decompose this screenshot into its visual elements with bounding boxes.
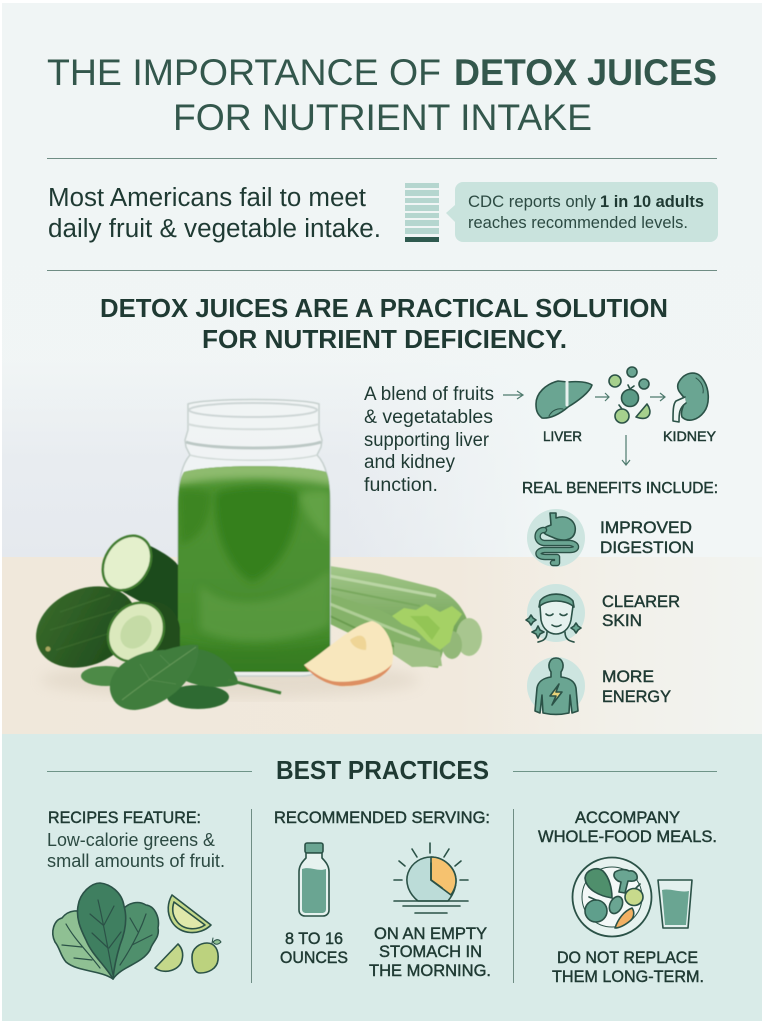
blend description xyxy=(364,384,494,496)
icon: fruits xyxy=(609,367,650,423)
benefit: skin: SKIN xyxy=(602,611,642,630)
section heading xyxy=(100,293,668,354)
benefit: energy xyxy=(527,657,671,715)
benefit: energy: ENERGY xyxy=(602,687,671,706)
organ labels: LIVER xyxy=(543,429,582,444)
intake statement xyxy=(48,184,381,243)
arrow: liver to fruit xyxy=(595,393,609,401)
icon: citrus and apple xyxy=(155,895,221,973)
benefit: digestion: DIGESTION xyxy=(600,538,694,557)
spinach xyxy=(81,645,281,710)
icon: glass of juice xyxy=(658,880,692,928)
icon: morning clock sun xyxy=(394,843,468,913)
callout: CDC: reaches recommended levels. xyxy=(468,214,688,232)
title: THE IMPORTANCE OF xyxy=(47,52,441,93)
column: serving: STOMACH IN xyxy=(379,942,482,961)
intake statement: daily fruit & vegetable intake. xyxy=(48,215,381,243)
organ labels: KIDNEY xyxy=(663,429,716,444)
organ labels xyxy=(543,429,716,444)
column: recipes xyxy=(47,809,225,979)
column: recipes: Low-calorie greens & xyxy=(47,830,215,850)
arrow: fruit to kidney xyxy=(650,393,665,401)
column: accompany: DO NOT REPLACE xyxy=(557,948,698,967)
hero photo xyxy=(2,398,698,734)
heading: best practices: BEST PRACTICES xyxy=(276,755,489,785)
column: serving: 8 TO 16 xyxy=(285,929,343,948)
title: FOR NUTRIENT INTAKE xyxy=(173,97,592,138)
column: accompany: ACCOMPANY xyxy=(575,809,680,827)
column: serving xyxy=(274,809,491,980)
arrow: down to benefits xyxy=(622,435,630,465)
column: serving: THE MORNING. xyxy=(369,961,491,980)
jar xyxy=(170,400,335,680)
blend description: & vegetatables xyxy=(364,407,493,428)
shadows xyxy=(40,662,420,698)
blend description: function. xyxy=(364,475,438,496)
benefit: energy: MORE xyxy=(602,667,654,686)
section heading: FOR NUTRIENT DEFICIENCY. xyxy=(202,324,567,354)
blend description: A blend of fruits xyxy=(364,384,494,405)
benefit: digestion: IMPROVED xyxy=(600,518,692,537)
benefits heading: REAL BENEFITS INCLUDE: xyxy=(522,480,718,497)
intake statement: Most Americans fail to meet xyxy=(48,184,366,212)
column: accompany: WHOLE-FOOD MEALS. xyxy=(538,828,717,846)
column: accompany xyxy=(538,809,717,986)
icon: face xyxy=(526,584,585,642)
benefit: skin: CLEARER xyxy=(602,592,680,611)
section heading: DETOX JUICES ARE A PRACTICAL SOLUTION xyxy=(100,293,668,323)
title: DETOX JUICES xyxy=(454,52,717,93)
title xyxy=(47,52,717,138)
blend description: and kidney xyxy=(364,452,455,473)
celery xyxy=(330,566,482,668)
column: serving: ON AN EMPTY xyxy=(374,924,487,943)
cucumbers xyxy=(23,527,180,683)
icon: kidney xyxy=(673,373,708,422)
column: recipes: RECIPES FEATURE: xyxy=(48,809,201,827)
column: recipes: small amounts of fruit. xyxy=(47,851,225,871)
bar stack: 1 in 10 xyxy=(405,183,439,242)
callout: CDC: 1 in 10 adults xyxy=(600,193,704,211)
column: accompany: THEM LONG-TERM. xyxy=(552,967,704,986)
callout: CDC: CDC reports only xyxy=(468,193,597,211)
column: serving: OUNCES xyxy=(280,948,348,967)
icon: bottle xyxy=(299,843,329,916)
benefit: digestion xyxy=(527,509,694,567)
icon: body with bolt xyxy=(527,657,585,715)
icon: plate of food xyxy=(572,858,652,936)
blend description: supporting liver xyxy=(364,430,490,451)
icon: stomach xyxy=(527,509,585,567)
panel: best practices xyxy=(2,734,762,1021)
table xyxy=(2,557,762,734)
callout: CDC xyxy=(446,182,718,242)
benefit: skin xyxy=(526,584,680,642)
arrow: blend to liver xyxy=(503,391,523,399)
wall xyxy=(2,360,762,558)
apple wedge xyxy=(304,621,393,686)
icon: liver xyxy=(536,381,592,418)
icon: greens xyxy=(53,883,158,979)
column: serving: RECOMMENDED SERVING: xyxy=(274,809,490,827)
